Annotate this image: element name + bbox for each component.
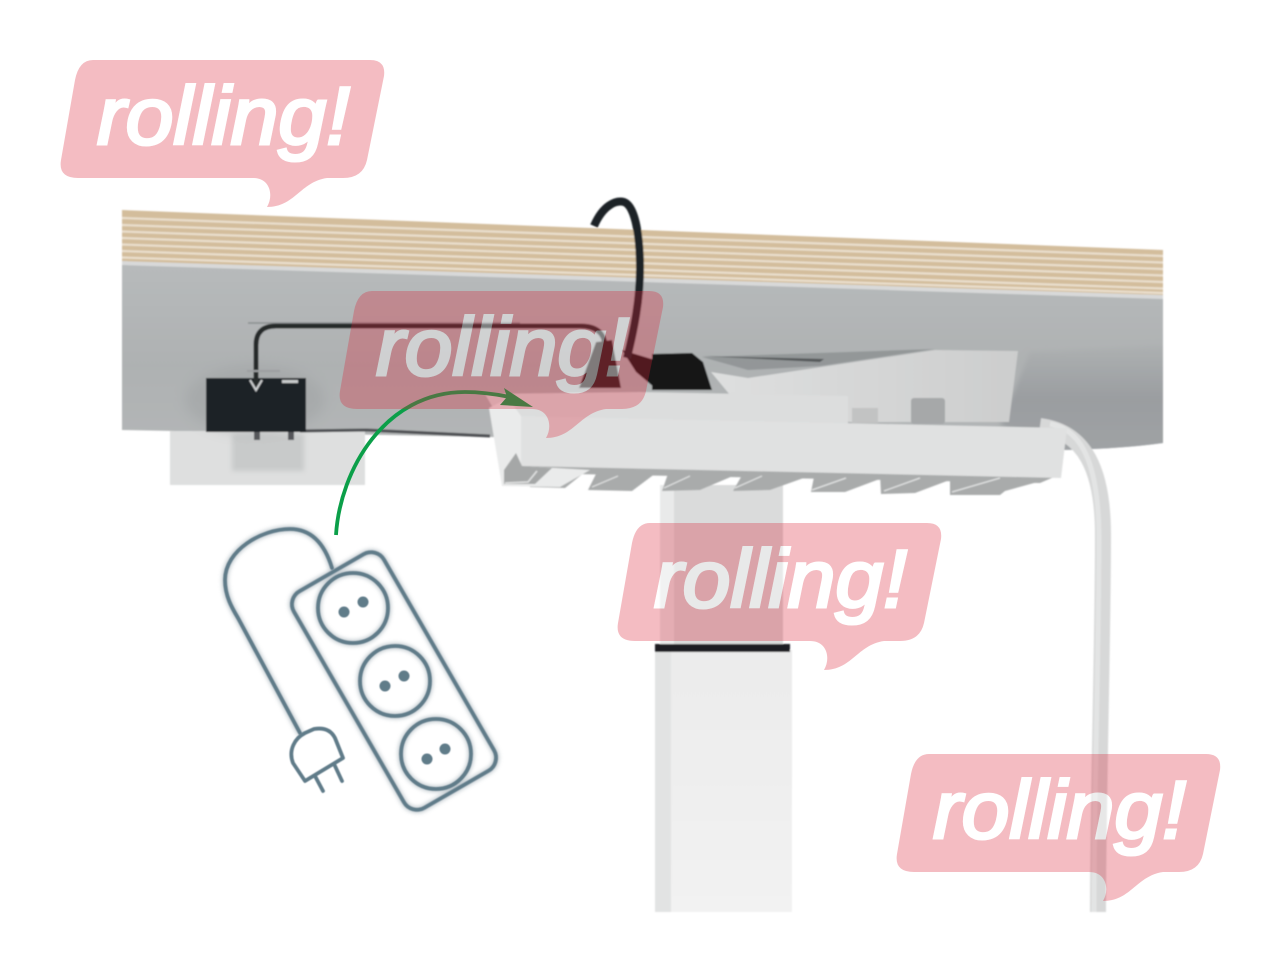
power cord	[225, 529, 332, 733]
watermark bubble: bottom right	[897, 754, 1220, 901]
black socket box	[206, 378, 306, 440]
desk top wood edge	[122, 210, 1163, 297]
socket 2	[360, 646, 430, 716]
upper desk column	[660, 485, 783, 645]
black internal cable	[247, 323, 605, 390]
icon shadow	[225, 529, 502, 815]
tray back plate	[711, 350, 1018, 422]
watermark bubble: over column	[618, 523, 941, 670]
desk and tray assembly	[122, 202, 1175, 912]
black cable looping over the desk	[594, 202, 640, 358]
black plug at the cable tray	[579, 340, 712, 390]
right shaded underside	[1000, 366, 1164, 450]
black collar on column	[655, 644, 790, 652]
tray underside band	[521, 462, 1061, 483]
tray front beam	[518, 416, 1067, 478]
tray J-profile end	[489, 398, 590, 487]
watermark bubble: over column: rolling!	[654, 534, 907, 625]
thin rail wire at the bracket	[300, 430, 490, 436]
comb highlights	[525, 472, 1000, 492]
watermark bubble: centre over desk	[340, 291, 663, 438]
tray comb teeth	[525, 466, 1045, 495]
green arrow to the tray	[336, 388, 533, 535]
desk underside	[122, 262, 1163, 450]
lower desk column	[655, 650, 792, 912]
rear tray bar	[485, 392, 848, 424]
socket 1	[318, 573, 388, 643]
socket 3	[401, 719, 471, 789]
white power cord	[1040, 424, 1103, 912]
left clip bracket	[170, 431, 365, 485]
strip body	[286, 547, 502, 815]
watermark bubble: top left: rolling!	[97, 71, 350, 162]
icon: three-socket power strip	[225, 529, 502, 815]
watermark bubble: bottom right: rolling!	[933, 765, 1186, 856]
tray back shadow	[702, 349, 935, 370]
watermark bubble: top left	[61, 60, 384, 207]
small tabs on back plate	[852, 398, 945, 424]
watermark bubble: centre over desk: rolling!	[376, 302, 629, 393]
plug	[291, 729, 343, 791]
shadow around socket box	[185, 366, 325, 434]
